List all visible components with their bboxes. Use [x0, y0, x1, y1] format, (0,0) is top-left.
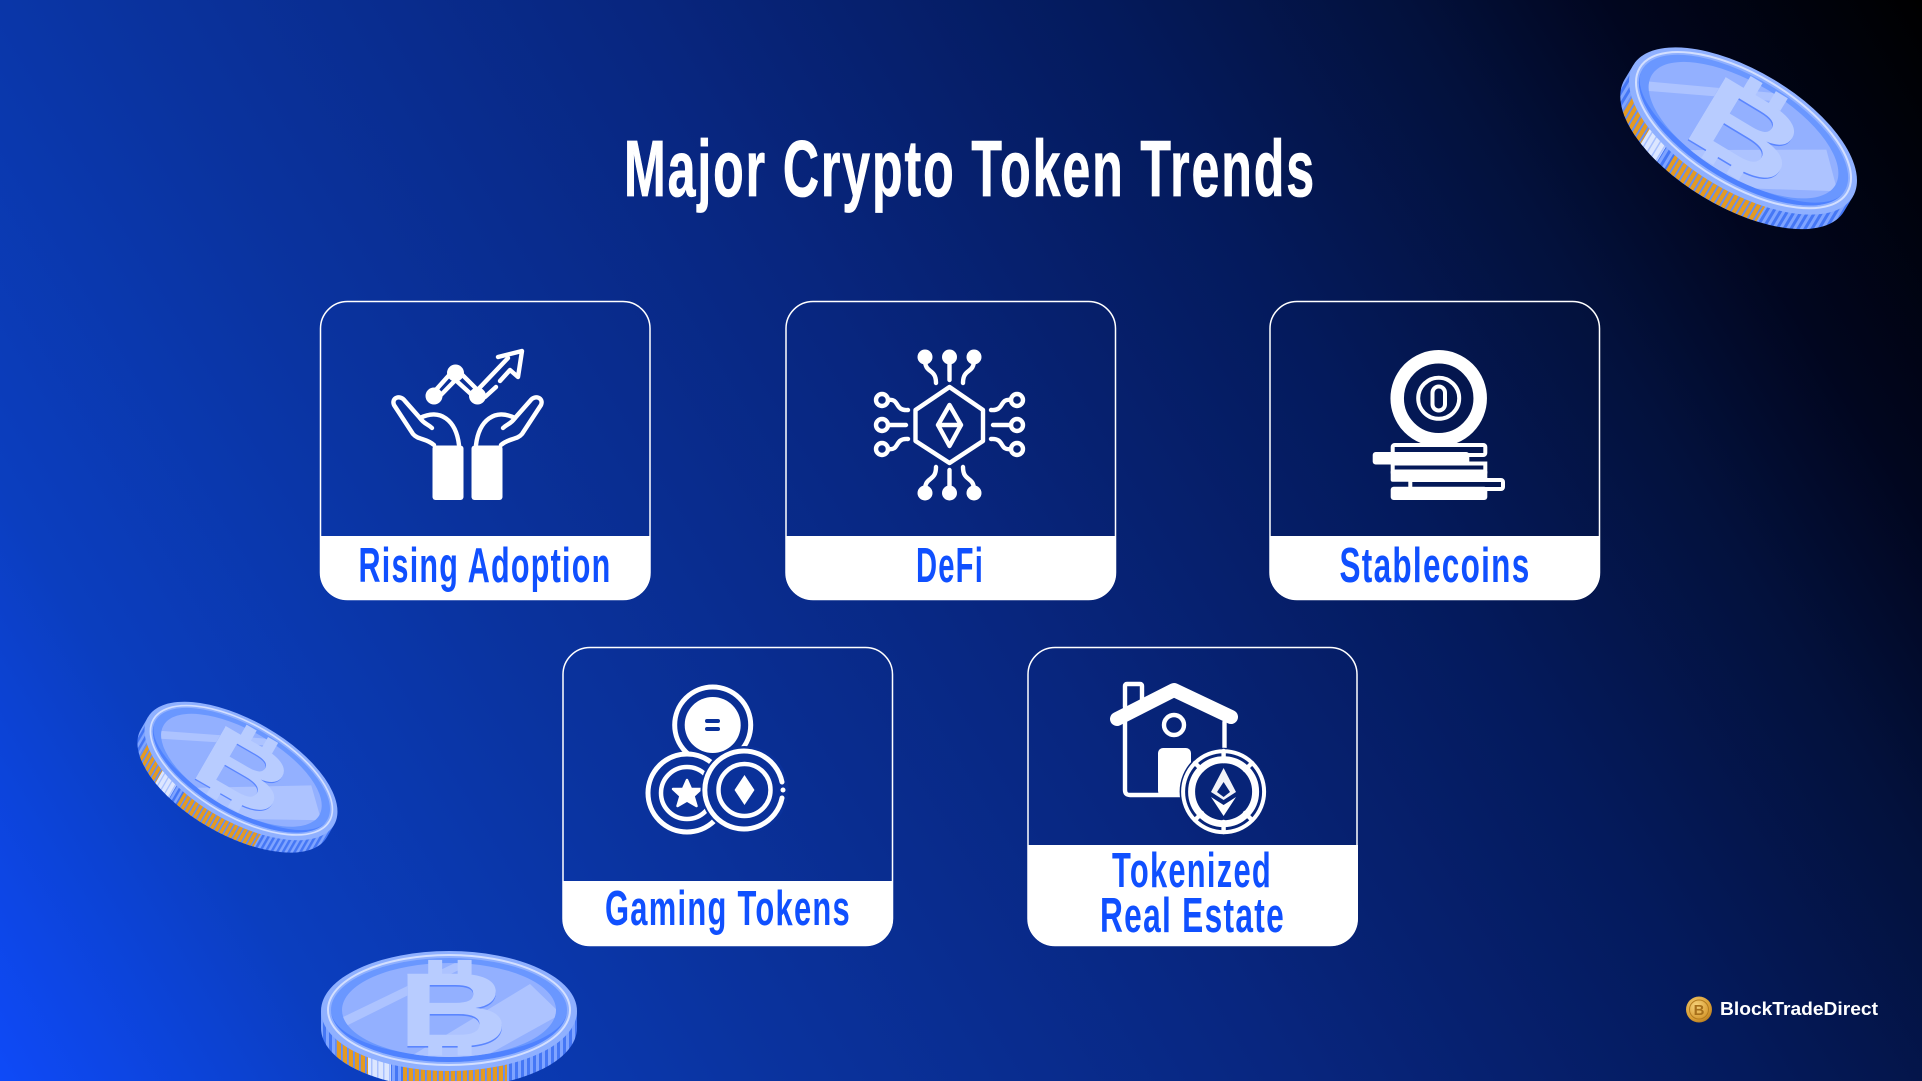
decorative coin: left: B [178, 705, 309, 838]
decorative coin: bottom [321, 951, 577, 1081]
title: Major Crypto Token Trends [624, 124, 1316, 213]
panel: Stablecoins [1270, 302, 1600, 600]
panel: Rising Adoption [320, 302, 650, 600]
decorative coin: bottom: B [397, 952, 509, 1069]
decorative coin: top right: B [1667, 54, 1823, 212]
icon: gold coin [1686, 996, 1712, 1022]
icon: stablecoin stack [1373, 357, 1503, 500]
decorative coin: left: B [178, 706, 309, 839]
decorative coin: top right: B [1668, 53, 1824, 211]
icon: ethereum hexagon circuit [876, 350, 1023, 500]
label: Tokenized Real Estate: Real Estate [1100, 889, 1285, 943]
icon: gold coin: B [1694, 1002, 1705, 1019]
brand name: BlockTradeDirect [1720, 999, 1878, 1019]
icon: gaming coins [648, 687, 788, 834]
panel: Tokenized Real Estate [1028, 648, 1358, 946]
label: Gaming Tokens: Gaming Tokens [605, 882, 851, 936]
decorative coin: bottom: B [397, 953, 509, 1071]
icon: house with ethereum coin [1117, 684, 1268, 836]
label: Tokenized Real Estate: Tokenized [1112, 844, 1272, 898]
label: Tokenized Real Estate [1100, 844, 1285, 943]
icon: hands and rising chart [393, 351, 542, 500]
panel: DeFi [786, 302, 1116, 600]
label: Stablecoins: Stablecoins [1340, 539, 1530, 593]
logo: BlockTradeDirect [1686, 996, 1878, 1022]
label: DeFi: DeFi [916, 539, 984, 593]
panel: Gaming Tokens [562, 648, 893, 946]
label: Rising Adoption: Rising Adoption [358, 539, 612, 593]
decorative coin: top right [1592, 14, 1884, 265]
decorative coin: left [114, 673, 359, 883]
